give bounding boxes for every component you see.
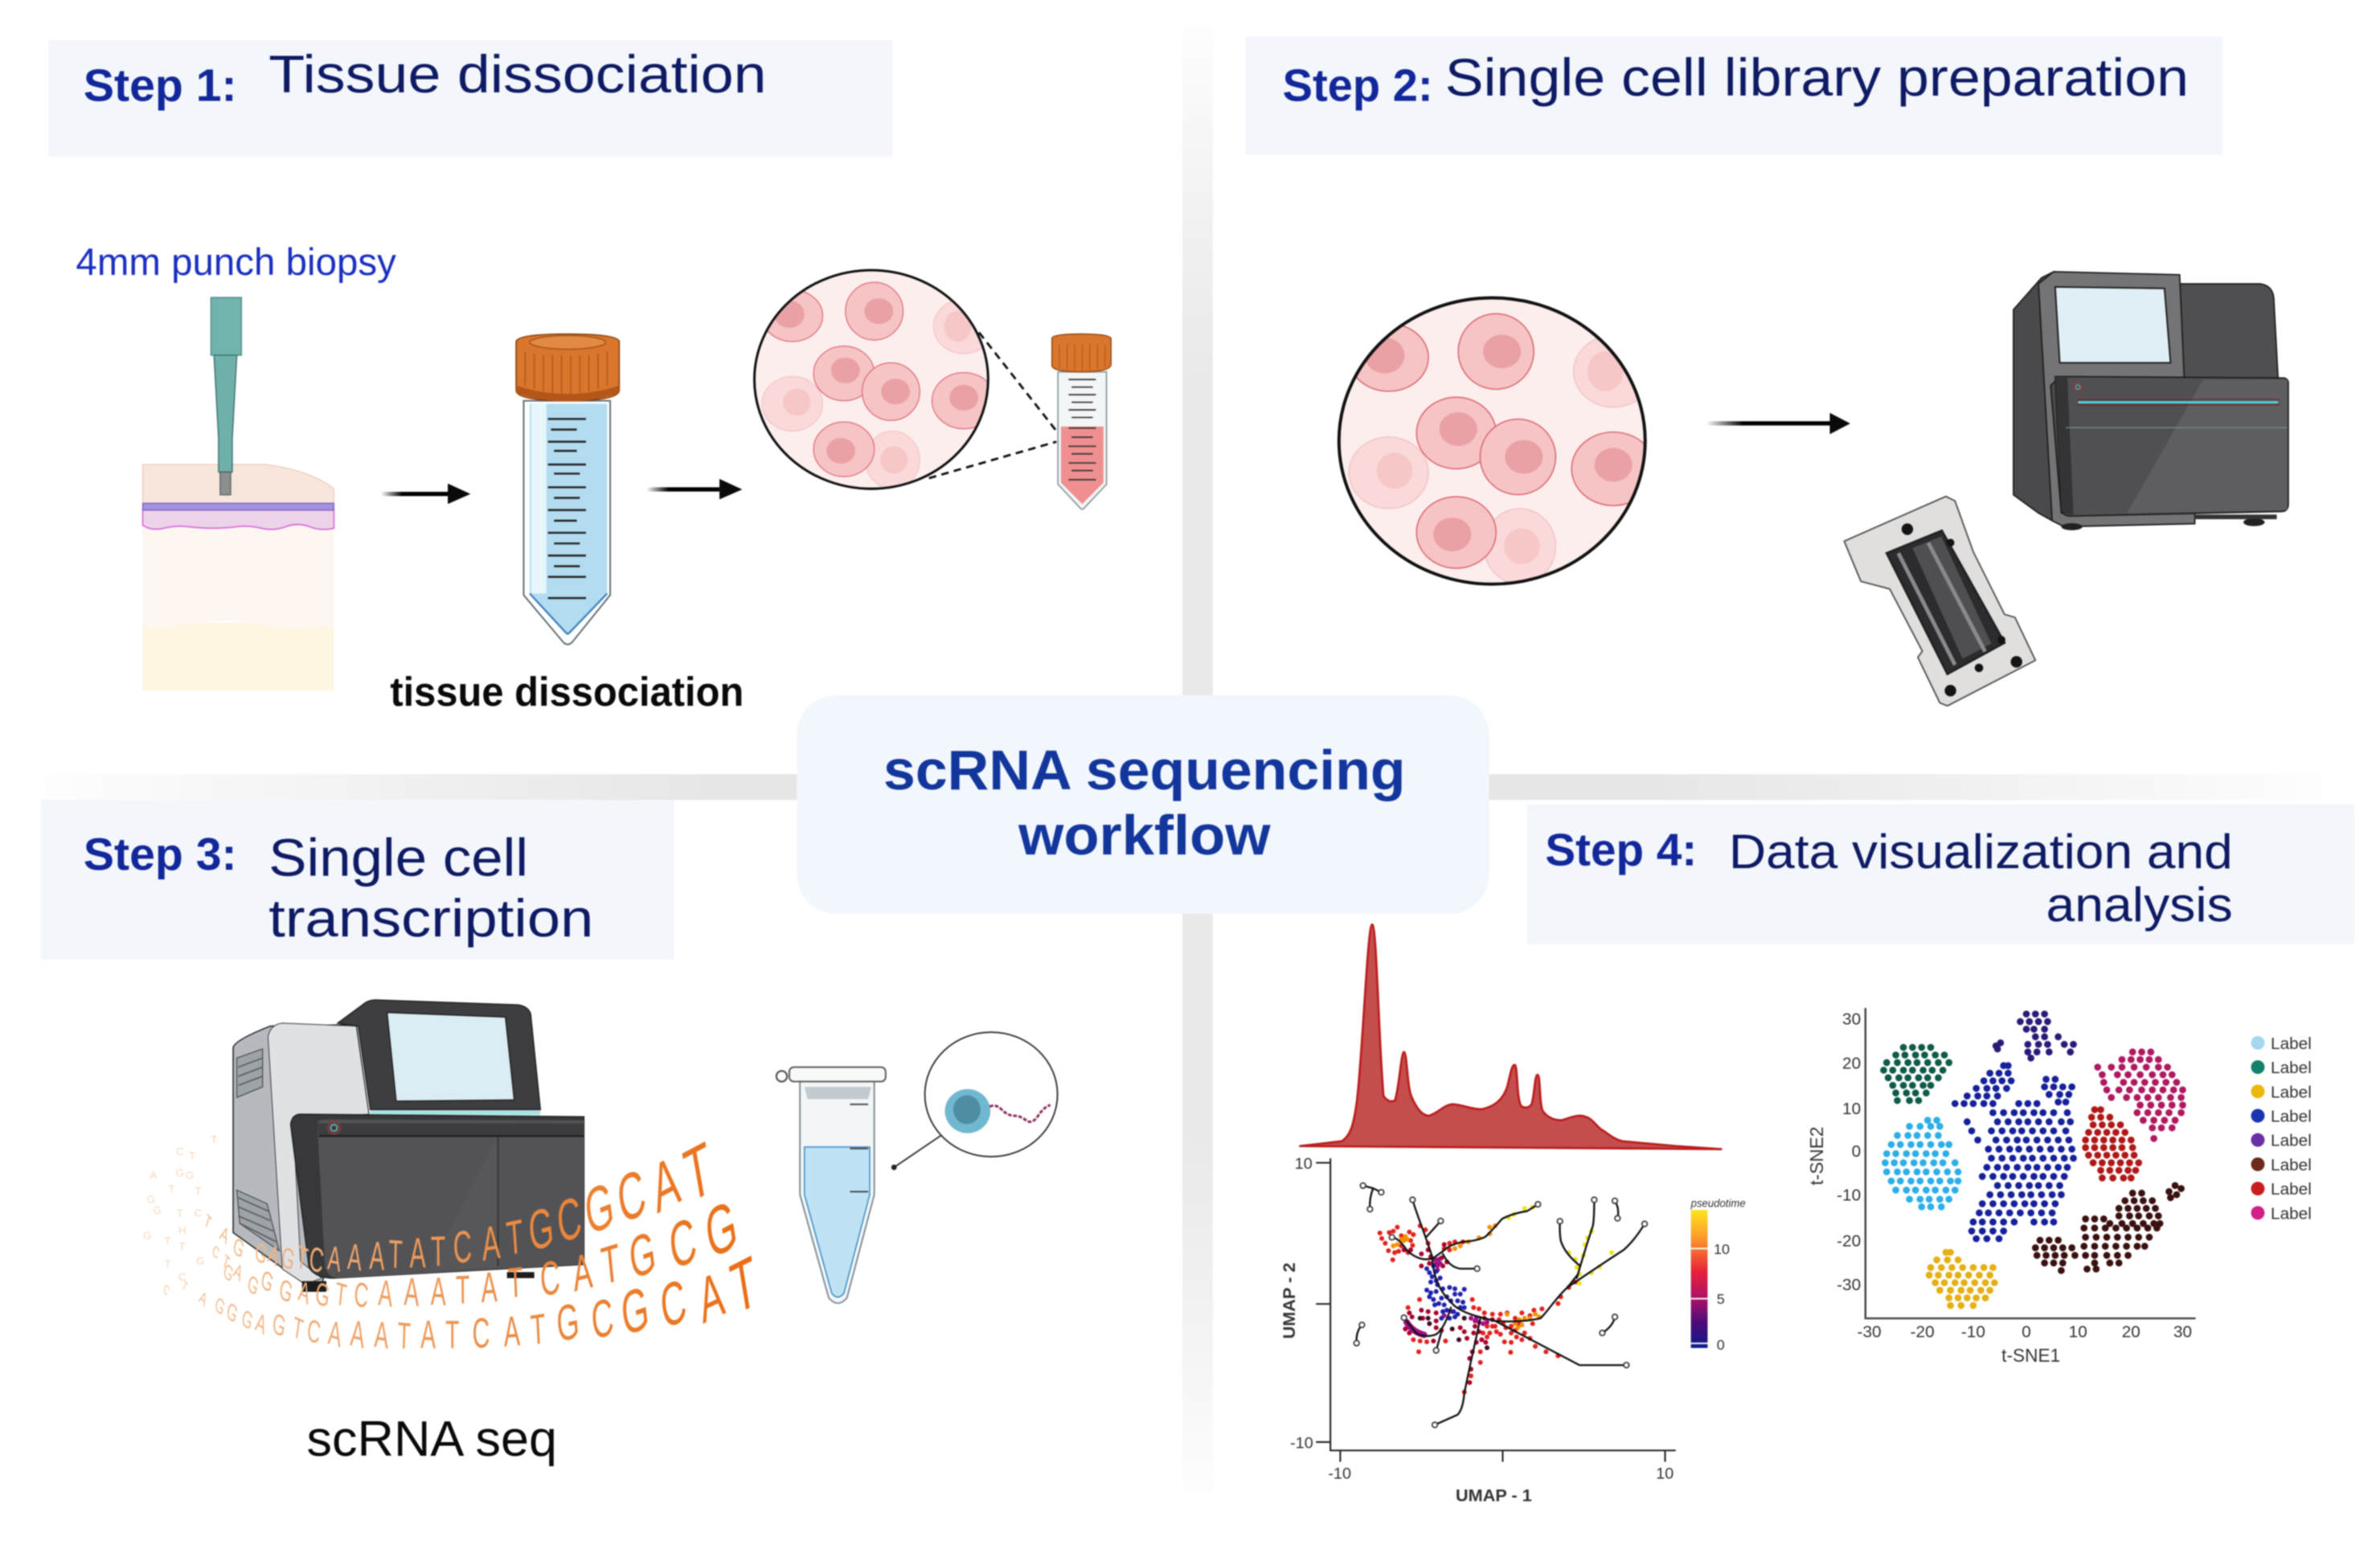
fading letters: A (150, 1170, 157, 1182)
sequence row 1: C (554, 1182, 584, 1256)
t-SNE x tick labels: -30 (1858, 1323, 1882, 1342)
sequence row 2: G (313, 1275, 332, 1315)
step 2 title: Single cell library preparation (1445, 48, 2189, 108)
panel: step 1 header (48, 40, 892, 157)
fading letters: G (143, 1230, 151, 1242)
sequence row 3: C (657, 1266, 690, 1342)
sequence row 1: G (231, 1232, 247, 1264)
t-SNE legend (2251, 1035, 2312, 1223)
t-SNE y tick labels: -10 (1837, 1186, 1861, 1205)
sequence row 2: A (431, 1268, 446, 1314)
workflow title: workflow (1018, 804, 1271, 867)
fading letters: G (196, 1255, 204, 1267)
sequence row 1: T (202, 1210, 214, 1234)
sequence row 3: T (445, 1311, 459, 1357)
sequence row 3: A (420, 1311, 436, 1357)
sequence row 2: C (353, 1275, 370, 1316)
icon: biopsy punch (211, 297, 241, 495)
arrow: tube to cells (646, 479, 742, 499)
cluster: red (2086, 1109, 2139, 1178)
UMAP cell dots (1380, 1207, 1612, 1392)
fading letters: C (178, 1271, 186, 1283)
t-SNE x tick labels: 0 (2022, 1323, 2031, 1342)
cluster: purple (1996, 1014, 2074, 1058)
UMAP tick labels: 10 (1295, 1155, 1313, 1173)
icon: library sequencer (2013, 272, 2288, 531)
caption: scRNA seq: scRNA seq (306, 1412, 557, 1467)
t-SNE y tick labels: -30 (1837, 1276, 1861, 1294)
fading letters: T (179, 1240, 186, 1252)
sequence row 1: A (218, 1221, 231, 1249)
sequence row 3: G (212, 1292, 227, 1321)
sequence row 3: A (503, 1308, 521, 1356)
chart: UMAP trajectory: UMAP - 2 (1279, 1263, 1299, 1339)
sequence row 2: G (277, 1272, 295, 1310)
fading letters: T (189, 1150, 195, 1162)
fading letters: G (147, 1194, 155, 1206)
chart: t-SNE scatter: t-SNE2 (1806, 1126, 1827, 1186)
biopsy label: 4mm punch biopsy (76, 241, 396, 284)
t-SNE axes (1866, 1008, 2196, 1318)
sequence row 2: A (378, 1272, 394, 1315)
sequence row 2: T (599, 1232, 623, 1297)
panel: step 2 header (1245, 36, 2223, 155)
sequence row 2: G (245, 1270, 261, 1302)
sequence row 2: G (259, 1264, 276, 1299)
UMAP trajectory end nodes (1354, 1183, 1647, 1428)
sequence row 2: A (403, 1268, 420, 1315)
t-SNE y tick labels: 10 (1842, 1100, 1861, 1118)
sequence row 1: A (369, 1232, 386, 1279)
fading letters: T (177, 1207, 183, 1219)
cluster: brown (2035, 1186, 2181, 1271)
fading letters: T (195, 1185, 202, 1197)
sequence row 2: G (626, 1218, 659, 1292)
sequence row 2: G (221, 1259, 236, 1287)
sequence row 2: A (571, 1242, 594, 1302)
step 3 title: Single cell (268, 829, 528, 888)
fading letters: C (176, 1145, 184, 1158)
fading letters: T (164, 1258, 171, 1270)
sequence row 3: T (726, 1241, 762, 1330)
sequence row 1: G (279, 1240, 297, 1278)
leader line (891, 1136, 941, 1170)
panel: step 3 illustration (143, 1000, 1058, 1467)
sequence row 2: T (507, 1259, 524, 1308)
fading letters: T (164, 1235, 171, 1247)
sequence row 3: A (374, 1313, 390, 1357)
t-SNE legend: Label (2271, 1132, 2312, 1150)
sequence row 3: A (694, 1257, 728, 1337)
step 1 title: Tissue dissociation (268, 45, 767, 105)
step 3 label: Step 3: (84, 830, 237, 880)
sequence row 3: C (472, 1309, 490, 1358)
chart: density plot (1300, 924, 1721, 1150)
t-SNE x tick labels: -10 (1961, 1323, 1985, 1342)
t-SNE y tick labels: -20 (1837, 1231, 1861, 1250)
sequence row 2: C (539, 1251, 561, 1307)
sequence row 3: C (305, 1312, 322, 1351)
step 3 title: transcription (268, 889, 593, 949)
sequence row 2: A (481, 1264, 498, 1312)
sequence row 1: A (346, 1236, 363, 1279)
pseudotime colorbar: pseudotime (1690, 1197, 1746, 1210)
UMAP tick labels: -10 (1328, 1465, 1351, 1482)
sequence row 1: C (307, 1239, 326, 1281)
UMAP axis titles: UMAP - 1 (1456, 1486, 1532, 1506)
UMAP tick labels: -10 (1290, 1435, 1313, 1453)
sequence row 3: A (253, 1307, 268, 1341)
cluster: gold (1929, 1252, 1994, 1305)
sequence row 3: G (555, 1292, 581, 1353)
t-SNE y tick labels: 30 (1842, 1010, 1861, 1029)
sequence row 2: G (700, 1185, 742, 1273)
fading letters: G (176, 1166, 184, 1178)
panel: step 3 header (41, 800, 674, 959)
sequence row 3: C (589, 1287, 616, 1351)
icon: flow cell cartridge (1844, 497, 2035, 706)
sequence row 3: G (240, 1305, 255, 1336)
step 2 label: Step 2: (1283, 61, 1433, 112)
sequence row 1: A (481, 1215, 502, 1272)
sequence row 1: C (453, 1221, 473, 1273)
t-SNE legend: Label (2271, 1035, 2312, 1053)
sequence row 3: A (326, 1313, 344, 1355)
fading letters: C (195, 1207, 203, 1219)
panel: step 4 charts (1279, 924, 2312, 1506)
chart: t-SNE scatter (1806, 1008, 2312, 1366)
sequence row 1: G (252, 1236, 270, 1271)
t-SNE axis titles: t-SNE1 (2001, 1345, 2060, 1366)
panel: center title (797, 695, 1489, 914)
UMAP tick labels: 10 (1656, 1465, 1673, 1482)
t-SNE x tick labels: 10 (2069, 1323, 2087, 1342)
arrow: cells to sequencer (1706, 413, 1850, 434)
icon: large conical tube (516, 334, 619, 645)
sequence row 1: T (678, 1125, 717, 1218)
panel: step 2 illustration (1339, 272, 2288, 706)
UMAP axes (1316, 1158, 1676, 1462)
sequence row 1: T (294, 1238, 310, 1277)
sequence row 2: A (297, 1275, 313, 1311)
cluster: light blue (1885, 1121, 1958, 1207)
sequence row 1: A (410, 1230, 426, 1277)
icon: sequencing machine (233, 1000, 584, 1292)
workflow title: scRNA sequencing (883, 739, 1406, 801)
sequence row 3: T (530, 1305, 547, 1354)
skin tissue block (142, 465, 334, 691)
t-SNE x tick labels: -20 (1911, 1323, 1935, 1342)
sequence row 3: T (180, 1277, 189, 1294)
icon: magnified cells (755, 270, 996, 489)
sequence row 1: G (581, 1168, 617, 1248)
t-SNE legend: Label (2271, 1180, 2312, 1199)
t-SNE x tick labels: 30 (2173, 1323, 2192, 1342)
sequence row 1: T (431, 1228, 446, 1276)
fading letters: G (154, 1204, 162, 1216)
sequence row 3: T (291, 1311, 305, 1347)
sequence row 3: C (162, 1281, 171, 1299)
sequence row 3: G (224, 1297, 240, 1330)
sequence row 3: T (397, 1314, 412, 1357)
pseudotime colorbar: 0 (1717, 1337, 1725, 1353)
t-SNE clusters (1883, 1014, 2183, 1305)
t-SNE legend: Label (2271, 1059, 2312, 1077)
panel: step 1 illustration (76, 241, 1111, 715)
step 1 label: Step 1: (84, 61, 237, 112)
sequence row 3: A (349, 1312, 367, 1356)
sequence row 1: A (326, 1239, 343, 1280)
t-SNE legend: Label (2271, 1108, 2312, 1126)
step 4 label: Step 4: (1545, 825, 1697, 875)
arrow: biopsy to tube (381, 483, 470, 504)
icon: microcentrifuge tube (776, 1068, 886, 1303)
icon: magnified single cell with transcript (925, 1032, 1058, 1157)
sequence row 1: A (266, 1239, 281, 1272)
step 4 title: analysis (2046, 877, 2233, 932)
sequence row 2: T (456, 1267, 470, 1313)
sequence row 2: T (334, 1276, 348, 1313)
fading letters: T (168, 1182, 174, 1195)
pseudotime colorbar (1690, 1197, 1746, 1353)
cluster: magenta (2098, 1052, 2183, 1138)
panel: step 4 header (1527, 805, 2354, 945)
cluster: green (1883, 1047, 1949, 1100)
t-SNE y tick labels: 20 (1842, 1054, 1861, 1072)
UMAP trajectories (1357, 1186, 1645, 1425)
t-SNE legend: Label (2271, 1083, 2312, 1101)
sequence row 2: C (665, 1203, 700, 1284)
sequence row 3: G (618, 1273, 652, 1350)
sequence row 2: T (220, 1250, 232, 1274)
sequence row 3: A (197, 1286, 210, 1311)
pseudotime colorbar: 10 (1714, 1241, 1730, 1257)
caption: tissue dissociation: tissue dissociation (390, 669, 743, 715)
icon: single cell suspension circle (1339, 297, 1655, 584)
step 4 title: Data visualization and (1729, 824, 2233, 879)
sequence row 1: G (526, 1195, 556, 1263)
fading letters: H (178, 1224, 186, 1236)
sequence row 1: A (646, 1141, 685, 1228)
t-SNE y tick labels: 0 (1852, 1142, 1861, 1161)
sequence letters (143, 1125, 762, 1358)
t-SNE legend: Label (2271, 1204, 2312, 1223)
cluster: blue (1955, 1066, 2074, 1239)
sequence row 1: T (388, 1231, 403, 1277)
t-SNE legend: Label (2271, 1156, 2312, 1174)
sequence row 3: G (270, 1306, 288, 1344)
sequence row 1: C (612, 1155, 650, 1239)
t-SNE x tick labels: 20 (2122, 1323, 2140, 1342)
fading letters: G (186, 1170, 194, 1182)
pseudotime colorbar: 5 (1717, 1291, 1725, 1307)
sequence row 2: C (211, 1242, 221, 1263)
dashed callout lines (929, 333, 1063, 478)
fading letters: T (211, 1133, 217, 1145)
chart: UMAP trajectory (1279, 1155, 1746, 1506)
sequence row 1: T (505, 1210, 525, 1266)
icon: small tube with cell suspension (1052, 334, 1111, 510)
sequence row 2: A (231, 1259, 245, 1286)
